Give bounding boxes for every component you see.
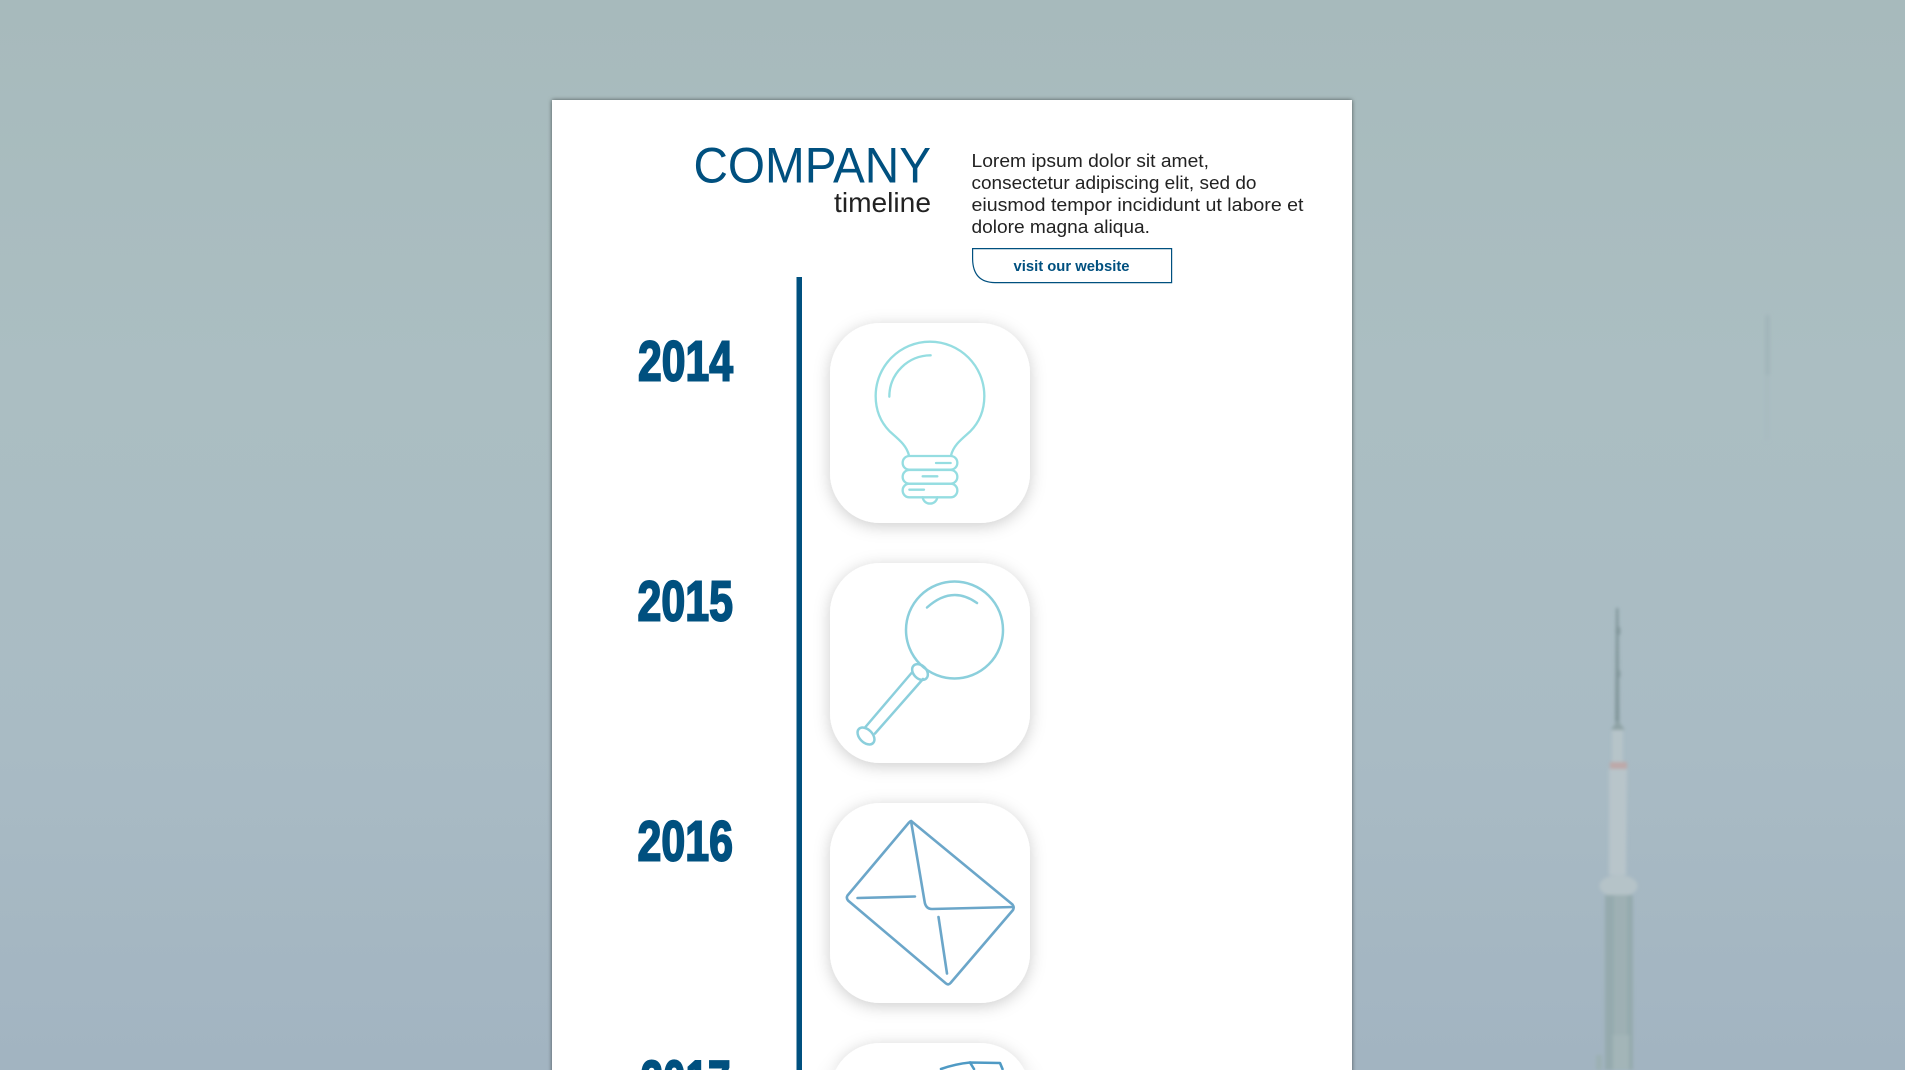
title: COMPANY: [694, 138, 931, 194]
title: timeline: [834, 187, 931, 218]
icon: envelope: [847, 821, 1014, 984]
text block: intro: dolore magna aliqua.: [972, 217, 1150, 237]
background: tall broadcast tower: [1596, 608, 1638, 1070]
title: [694, 138, 931, 218]
icon: pie chart: [941, 1062, 1002, 1069]
year 2015: 2015: [638, 570, 733, 634]
card: lightbulb: [830, 323, 1030, 523]
icon: lightbulb: [876, 342, 984, 504]
button: visit our website: [973, 249, 1172, 283]
card: pie chart: [830, 1043, 1030, 1070]
panel: white timeline sheet: [552, 100, 1352, 1070]
button: visit our website: visit our website: [1014, 258, 1130, 275]
icon: magnifying glass: [854, 582, 1003, 748]
text block: intro: [972, 151, 1304, 237]
year 2014: 2014: [638, 330, 733, 394]
year 2016: 2016: [638, 810, 733, 874]
text block: intro: consectetur adipiscing elit, sed do: [972, 173, 1256, 193]
text block: intro: eiusmod tempor incididunt ut labore et: [972, 195, 1304, 215]
card: envelope: [830, 803, 1030, 1003]
card: magnifying glass: [830, 563, 1030, 763]
background: faint distant tower: [1766, 315, 1769, 440]
timeline vertical line: [796, 277, 802, 1070]
text block: intro: Lorem ipsum dolor sit amet,: [972, 151, 1209, 171]
